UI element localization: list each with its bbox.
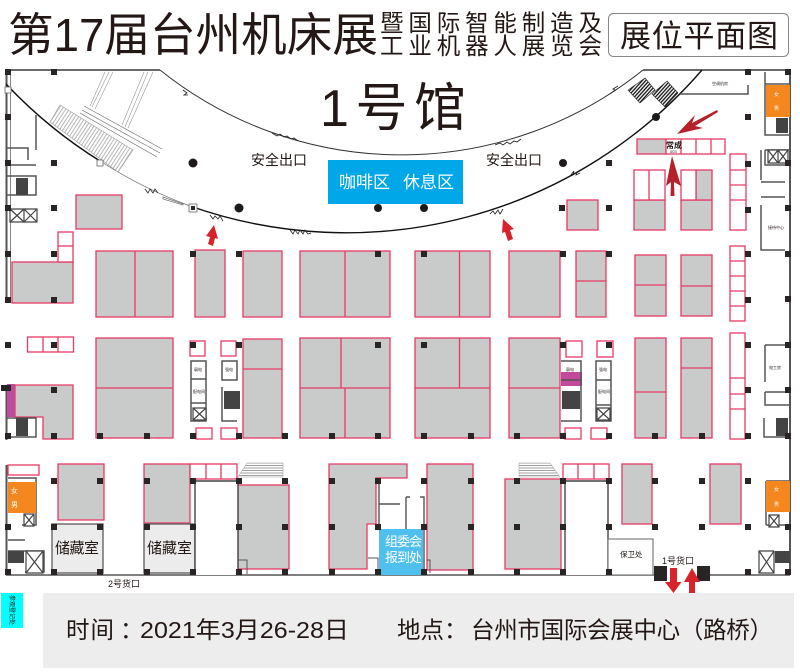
subtitle: 暨国际智能制造及 — [380, 10, 602, 36]
small room labels: 配电间 — [598, 388, 610, 394]
exhibitor label: 003 — [670, 149, 677, 154]
subtitle: 工业机器人展览会 — [380, 33, 602, 59]
stairs: upper left — [50, 72, 162, 172]
venue: ： — [444, 617, 468, 643]
coffee and rest area: 休息区 — [403, 173, 454, 192]
lift shafts — [10, 150, 788, 573]
safety exit labels: 安全出口 — [486, 152, 542, 168]
white halls — [195, 481, 653, 575]
subtitle — [380, 10, 602, 59]
restroom labels: 女 — [774, 486, 779, 493]
small room labels: 电工房 — [769, 364, 781, 370]
registration tag: 参观登记处 — [8, 595, 16, 625]
magenta markers — [7, 372, 582, 417]
arrow: entrance left — [206, 225, 218, 246]
storage room labels: 储藏室 — [147, 540, 192, 557]
registration tag — [1, 593, 23, 628]
restrooms — [8, 85, 790, 513]
small room labels — [193, 80, 784, 394]
organising committee desk: 组委会 — [385, 534, 422, 549]
arrow: entrance right — [502, 219, 514, 241]
arrow: dock out — [665, 568, 682, 593]
escalators — [8, 118, 790, 563]
stairs: upper right — [628, 78, 678, 107]
booths: grey stands — [12, 139, 741, 570]
arrow: to booth from right — [677, 110, 718, 134]
organising committee desk: 报到处 — [385, 550, 422, 565]
loading dock labels: 2号货口 — [108, 578, 140, 589]
restroom labels — [11, 91, 779, 509]
committee room walls — [238, 481, 430, 574]
arrow: to booth from below — [666, 156, 681, 196]
security office label: 保卫处 — [620, 549, 643, 559]
restroom labels: 男 — [774, 502, 779, 508]
storage room labels — [55, 540, 192, 557]
small room labels: 强电 — [599, 366, 607, 372]
exit doors — [145, 86, 618, 234]
hall walls — [6, 70, 790, 575]
info bar — [43, 593, 794, 668]
restroom labels: 男 — [11, 501, 18, 509]
venue: 地点 — [397, 617, 444, 643]
stairs: lower — [238, 463, 560, 477]
small room labels: 弱电 — [194, 366, 202, 372]
date — [66, 617, 349, 643]
exhibitor label: 常成 — [666, 140, 682, 150]
heading: floor plan badge: 展位平面图 — [620, 19, 778, 54]
safety exit labels — [251, 152, 542, 168]
booths: white stands and dividers — [8, 139, 746, 479]
small room labels: 接待中心 — [768, 224, 784, 230]
date: 时间 — [66, 617, 114, 643]
coffee and rest area — [328, 160, 463, 204]
coffee and rest area: 咖啡区 — [339, 173, 390, 192]
date: 2021年3月26-28日 — [140, 617, 349, 643]
venue: 台州市国际会展中心（路桥） — [471, 617, 773, 643]
hall name: 1号馆 — [320, 80, 466, 138]
date: ： — [120, 617, 144, 643]
storage room labels: 储藏室 — [55, 540, 99, 557]
loading dock labels — [108, 555, 694, 589]
small room labels: 弱电 — [566, 366, 574, 372]
exhibitor label — [666, 140, 682, 154]
loading dock labels: 1号货口 — [662, 555, 694, 566]
small room labels: 配电间 — [193, 388, 205, 394]
safety exit labels: 安全出口 — [251, 152, 307, 168]
columns — [1, 69, 791, 575]
small room labels: 空调机房 — [712, 80, 728, 86]
dock doors — [654, 566, 710, 581]
storage rooms — [52, 524, 195, 573]
title: 第17届台州机床展 — [8, 9, 378, 61]
restroom labels: 女 — [11, 486, 18, 495]
floor plan — [1, 69, 791, 593]
restroom labels: 男 — [774, 106, 779, 112]
hollow wall columns — [5, 87, 197, 212]
small room labels: 强电 — [225, 366, 233, 372]
organising committee desk — [379, 529, 423, 575]
restroom labels: 女 — [774, 91, 779, 98]
arrow: dock in — [684, 568, 700, 593]
service rooms — [7, 72, 790, 572]
arrows — [206, 110, 718, 593]
round columns — [188, 113, 660, 212]
